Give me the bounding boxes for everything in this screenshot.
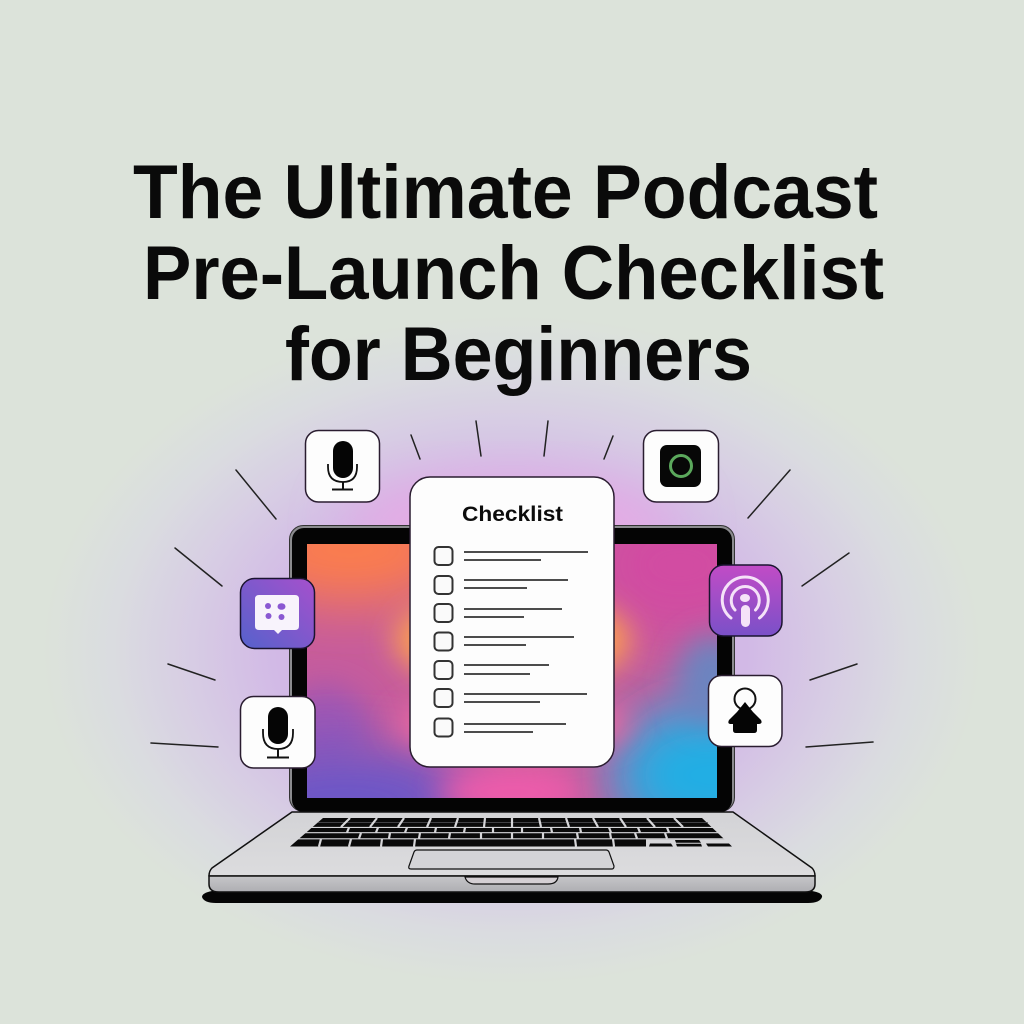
- checkboxes: [434, 547, 452, 736]
- icon: house with ring: [708, 676, 782, 746]
- title: The Ultimate Podcast: [133, 150, 878, 235]
- keyboard: [290, 818, 736, 847]
- checklist lines: [464, 552, 588, 732]
- title: [133, 150, 884, 397]
- checklist card: [410, 477, 614, 767]
- icon: chat bubble app: [240, 578, 314, 648]
- checklist heading: Checklist: [462, 503, 563, 526]
- background glow: [42, 315, 982, 985]
- title: Pre-Launch Checklist: [143, 231, 884, 316]
- radiating lines: [151, 421, 873, 747]
- icon: top microphone: [306, 430, 380, 502]
- laptop: [202, 495, 822, 903]
- front notch: [465, 877, 558, 884]
- title: for Beginners: [285, 312, 752, 397]
- icon: bottom-left microphone: [240, 696, 315, 768]
- laptop base front: [209, 876, 815, 892]
- laptop lid: [290, 526, 734, 812]
- laptop screen: [307, 544, 717, 798]
- laptop shadow: [202, 891, 822, 903]
- icon: green ring app: [644, 430, 718, 502]
- icon: podcast app: [710, 565, 782, 636]
- trackpad: [409, 850, 614, 869]
- laptop base deck: [209, 812, 815, 876]
